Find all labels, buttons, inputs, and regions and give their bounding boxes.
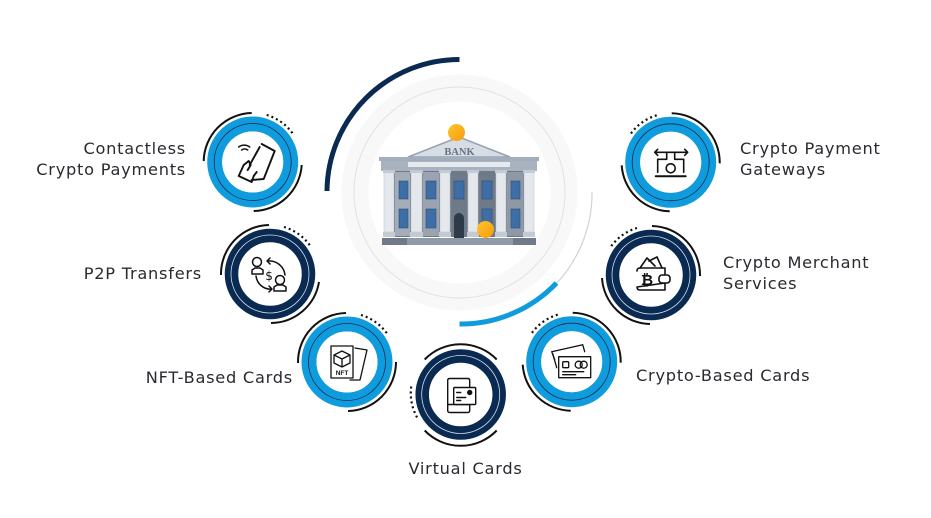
label: Services [723,274,797,293]
node: Contactless Crypto Payments [204,113,302,211]
blue arc [460,283,556,324]
label: Gateways [740,160,826,179]
navy arc [327,60,460,191]
central rings [354,87,565,298]
node: Crypto Merchant Services [602,226,700,324]
icon: person to person [252,258,286,292]
label: Crypto-Based Cards [636,366,810,385]
coin top [448,124,465,141]
node: Crypto Payment Gateways [622,113,720,211]
NFT text: NFT [336,370,348,377]
bank label: BANK [444,147,475,158]
node: P2P Transfers [221,225,319,323]
label: Crypto Merchant [723,253,869,272]
icon: bitcoin wallet [637,257,670,290]
label: P2P Transfers [84,264,202,283]
label: NFT-Based Cards [146,368,293,387]
bitcoin sign: ₿ [641,271,653,289]
label: Crypto Payment [740,139,881,158]
node: Crypto-Based Cards [523,313,621,411]
label: Virtual Cards [408,459,523,478]
icon: phone card [448,378,476,412]
bank building [379,137,539,245]
label: Crypto Payments [36,160,186,179]
dollar sign: $ [265,269,273,283]
node: NFT-Based Cards [298,313,396,411]
label: Contactless [83,139,186,158]
icon: gateway [655,149,688,176]
node: Virtual Cards [411,344,500,446]
icon: NFT card [331,346,367,380]
icon: contactless card [239,144,275,182]
coin bottom [477,221,494,238]
icon: credit cards [552,345,591,378]
thin grey arc [556,192,592,284]
